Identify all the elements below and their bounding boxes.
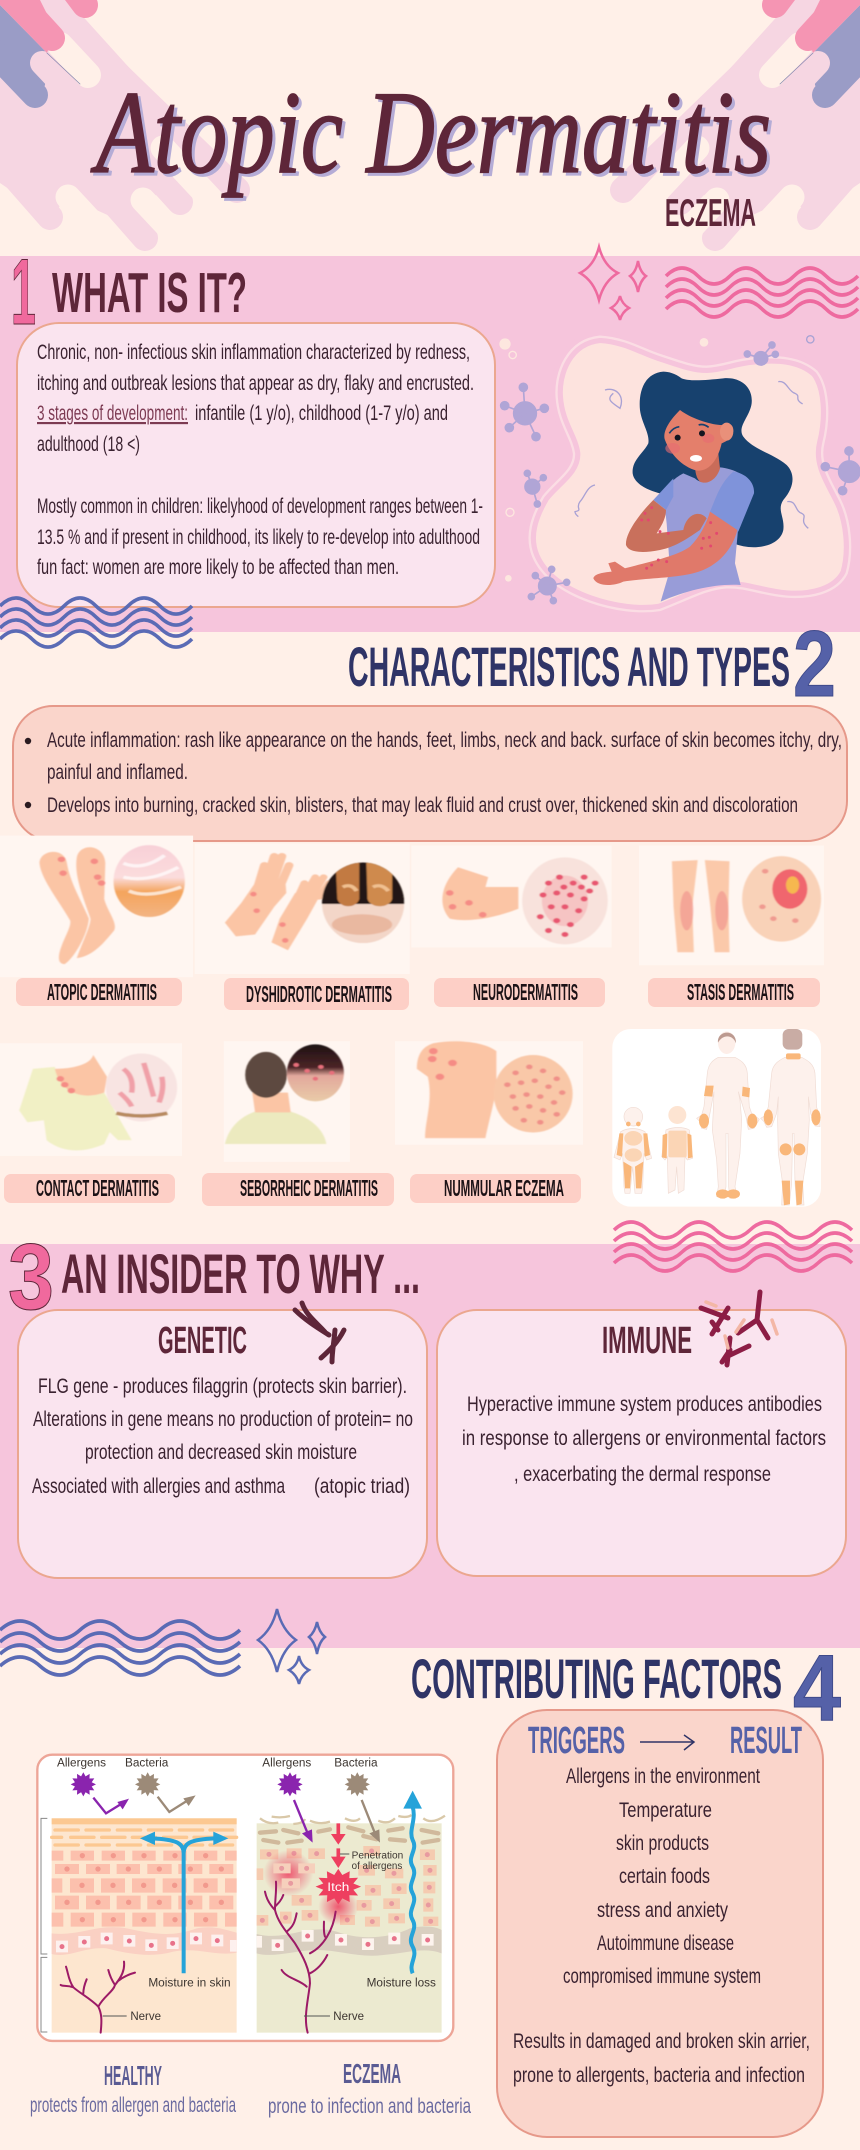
genetic text: (atopic triad)	[314, 1474, 410, 1498]
waves: blue left of section 4	[0, 1621, 240, 1675]
dyshidrotic hands	[225, 856, 404, 950]
right arm	[593, 512, 737, 585]
decoration: top right diagonal blobs	[615, 0, 860, 296]
genetic heading: GENETIC	[158, 1320, 247, 1362]
sparkles: blue	[258, 1609, 325, 1684]
heading: an insider to why: AN INSIDER TO WHY ...	[61, 1242, 420, 1305]
caption: healthy: HEALTHY	[104, 2060, 162, 2091]
trigger list: skin products	[616, 1831, 709, 1855]
panel: genetic	[18, 1303, 427, 1578]
genetic text: FLG gene - produces filaggrin (protects skin barrier).	[38, 1374, 407, 1398]
subtitle: eczema: ECZEMA	[665, 192, 756, 235]
penetration arrows	[93, 1795, 380, 1868]
type label: nummular	[410, 1174, 581, 1203]
genetic text	[32, 1374, 413, 1498]
definition paragraph: 3 stages of development:	[37, 401, 188, 425]
panel: triggers and result	[497, 1710, 823, 2137]
arrow	[640, 1735, 694, 1750]
heading: what is it: WHAT IS IT?	[52, 261, 247, 325]
diagram labels: Allergens	[262, 1755, 311, 1769]
panel: skin barrier diagram	[37, 1755, 453, 2041]
trigger list: compromised immune system	[563, 1964, 761, 1988]
immune heading: IMMUNE	[602, 1320, 692, 1362]
panel: body distribution diagram	[612, 1029, 821, 1207]
type label: dyshidrotic	[224, 978, 409, 1010]
rash spots	[642, 508, 717, 568]
type label: neurodermatitis: NEURODERMATITIS	[473, 979, 578, 1005]
decoration: top left diagonal blobs	[0, 0, 245, 296]
small bubbles	[499, 336, 814, 582]
healthy skin cross-section	[52, 1818, 237, 2033]
type label: seborrheic: SEBORRHEIC DERMATITIS	[240, 1175, 378, 1201]
contact dermatitis shirt	[19, 1053, 177, 1150]
type label: seborrheic	[202, 1173, 394, 1206]
genetic text: protection and decreased skin moisture	[85, 1440, 357, 1464]
bullet one: painful and inflamed.	[47, 760, 188, 784]
section band 3	[0, 1244, 860, 1648]
neurodermatitis arm	[442, 857, 608, 944]
itch burst: Itch	[327, 1880, 349, 1894]
waves: pink top right	[666, 268, 858, 317]
type label: contact: CONTACT DERMATITIS	[36, 1175, 159, 1201]
neck and face	[695, 453, 720, 483]
definition paragraph: Chronic, non- infectious skin inflammation characterized by redness,	[37, 340, 470, 364]
trigger list: certain foods	[619, 1864, 710, 1888]
genetic text: Alterations in gene means no production of protein= no	[33, 1407, 413, 1431]
type label: dyshidrotic: DYSHIDROTIC DERMATITIS	[246, 981, 392, 1007]
definition paragraph: adulthood (18 <)	[37, 432, 140, 456]
diagram labels: of allergens	[352, 1861, 402, 1872]
seborrheic head	[225, 1044, 344, 1144]
adult front	[697, 1031, 759, 1199]
definition paragraph	[37, 340, 474, 456]
diagram labels	[57, 1755, 436, 2023]
waves: pink right of section 3	[614, 1222, 852, 1271]
trigger list: Allergens in the environment	[566, 1764, 760, 1788]
panel: triggers and result: TRIGGERS	[528, 1720, 625, 1762]
diagram labels: Bacteria	[334, 1755, 378, 1769]
diagram labels: Moisture in skin	[148, 1976, 231, 1990]
stasis legs	[672, 856, 821, 952]
text: 1	[11, 239, 36, 344]
nerves	[61, 1882, 336, 2033]
left arm	[626, 500, 707, 552]
virus particles	[501, 342, 860, 604]
genetic text: Associated with allergies and asthma	[32, 1474, 285, 1498]
diagram labels: Bacteria	[125, 1755, 169, 1769]
section number 3: 3	[8, 1224, 54, 1329]
section number 2: 2	[793, 611, 836, 716]
icon: chromosome	[295, 1303, 344, 1362]
type label: neurodermatitis	[434, 978, 605, 1007]
diagram labels: Allergens	[57, 1755, 106, 1769]
caption: eczema: prone to infection and bacteria	[268, 2095, 471, 2118]
type label: atopic: ATOPIC DERMATITIS	[47, 979, 157, 1005]
diagram labels: Moisture loss	[367, 1976, 436, 1990]
prevalence paragraph: 13.5 % and if present in childhood, its likely to re-develop into adulthood	[37, 525, 480, 549]
prevalence paragraph: Mostly common in children: likelyhood of development ranges between 1-	[37, 494, 483, 518]
diagram labels: Penetration	[352, 1850, 403, 1861]
child front	[614, 1107, 652, 1193]
trigger list: stress and anxiety	[597, 1898, 728, 1922]
diagram labels: Nerve	[333, 2009, 364, 2023]
trigger list: Temperature	[619, 1798, 712, 1822]
child back	[662, 1106, 693, 1193]
type label: nummular: NUMMULAR ECZEMA	[444, 1175, 564, 1201]
type label: atopic	[16, 978, 182, 1006]
atopic legs	[39, 845, 185, 964]
tile backgrounds	[0, 836, 824, 1162]
immune text	[462, 1392, 826, 1486]
definition paragraph: infantile (1 y/o), childhood (1-7 y/o) and	[195, 401, 448, 425]
bullet one	[25, 728, 842, 784]
caption: eczema: ECZEMA	[343, 2058, 401, 2089]
brackets	[41, 1818, 47, 2032]
caption: healthy	[30, 2060, 236, 2117]
waves: blue bottom left of section 1	[0, 598, 192, 647]
icon: antibodies	[701, 1292, 777, 1365]
sparkles: pink	[580, 247, 646, 320]
adult back	[761, 1029, 821, 1205]
eczema skin cross-section	[257, 1815, 445, 2033]
nummular torso	[417, 1041, 573, 1138]
definition paragraph: itching and outbreak lesions that appear as dry, flaky and encrusted.	[37, 371, 474, 395]
immune text: , exacerbating the dermal response	[514, 1462, 771, 1486]
caption: eczema	[268, 2058, 471, 2118]
squiggles	[575, 381, 808, 528]
prevalence paragraph: fun fact: women are more likely to be affected than men.	[37, 555, 399, 579]
allergen and bacteria stars	[71, 1772, 370, 1796]
type label: stasis	[648, 978, 820, 1007]
panel: characteristics bullets	[13, 706, 847, 841]
moisture arrows	[140, 1791, 422, 1973]
itch burst	[316, 1869, 361, 1904]
caption: healthy: protects from allergen and bacteria	[30, 2094, 236, 2117]
panel: immune	[437, 1292, 846, 1576]
illustration: woman scratching rash	[499, 336, 860, 611]
hair	[633, 372, 793, 547]
trigger list: Autoimmune disease	[597, 1931, 734, 1955]
prevalence paragraph	[37, 494, 483, 579]
panel: what is it text	[17, 323, 495, 607]
skin type illustrations	[0, 836, 824, 1162]
trigger list	[563, 1764, 761, 1988]
result text	[513, 2029, 810, 2087]
section number 4: 4	[793, 1635, 841, 1740]
type label: contact	[4, 1174, 175, 1203]
section band 1	[0, 256, 860, 632]
shirt	[661, 467, 753, 602]
diagram labels: Nerve	[130, 2009, 161, 2023]
